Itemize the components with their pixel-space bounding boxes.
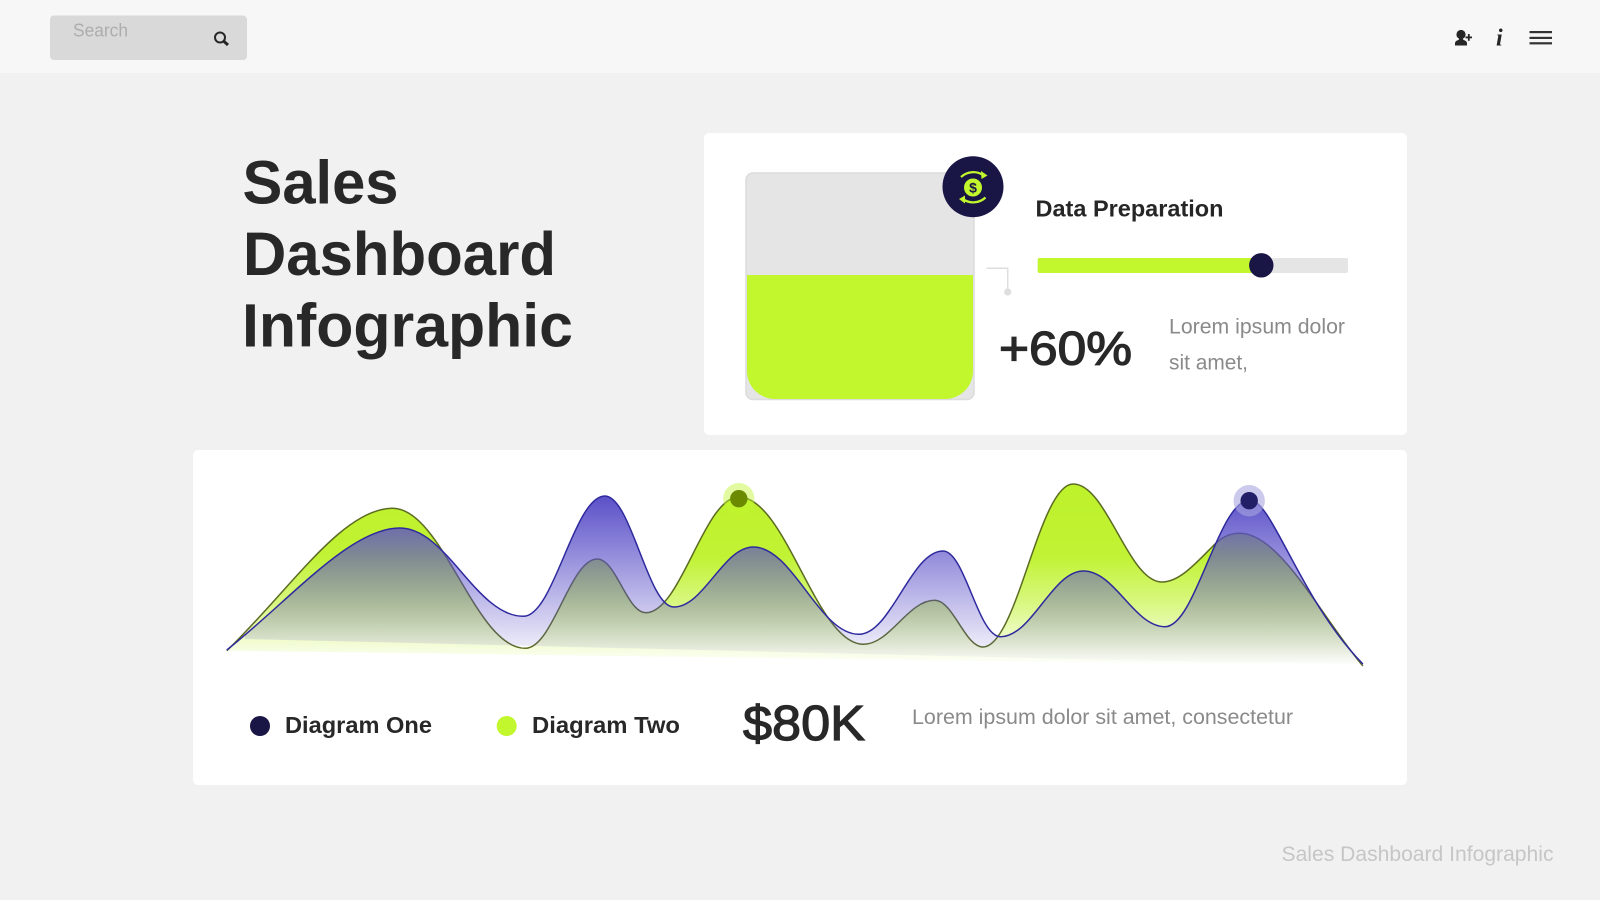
marker: blue peak (1234, 485, 1265, 516)
series: diagram two (227, 484, 1363, 666)
chart description: Lorem ipsum dolor sit amet, consectetur (912, 705, 1293, 729)
description (1169, 314, 1345, 374)
description: Lorem ipsum dolor (1169, 314, 1345, 338)
stat: $80K: $80K (743, 697, 865, 751)
title: Sales (242, 148, 398, 217)
stat: +60%: +60% (999, 321, 1132, 374)
search box: Search (73, 20, 128, 40)
icon: info: i (1496, 26, 1503, 52)
connector (987, 268, 1011, 296)
icon: add user (1455, 30, 1472, 46)
title: Infographic (242, 292, 573, 361)
area chart (227, 483, 1363, 666)
search box (50, 16, 247, 60)
marker: green peak (723, 483, 754, 514)
tank gauge (746, 173, 974, 400)
icon: menu (1530, 31, 1552, 44)
top navigation bar (0, 0, 1600, 73)
icon: money exchange badge (942, 156, 1004, 217)
legend: diagram one: Diagram One (285, 712, 432, 738)
legend: diagram two: Diagram Two (532, 712, 680, 738)
series: diagram one (227, 496, 1363, 664)
icon: money exchange badge: $ (969, 180, 977, 196)
icon: magnifier (215, 32, 228, 45)
title: Dashboard (243, 220, 556, 289)
description: sit amet, (1169, 350, 1248, 374)
heading: data preparation: Data Preparation (1036, 196, 1224, 222)
footer label: Sales Dashboard Infographic (1282, 842, 1554, 866)
progress slider (1038, 253, 1348, 278)
panel: area chart (193, 450, 1407, 785)
title (242, 148, 573, 361)
panel: data preparation (704, 133, 1407, 435)
